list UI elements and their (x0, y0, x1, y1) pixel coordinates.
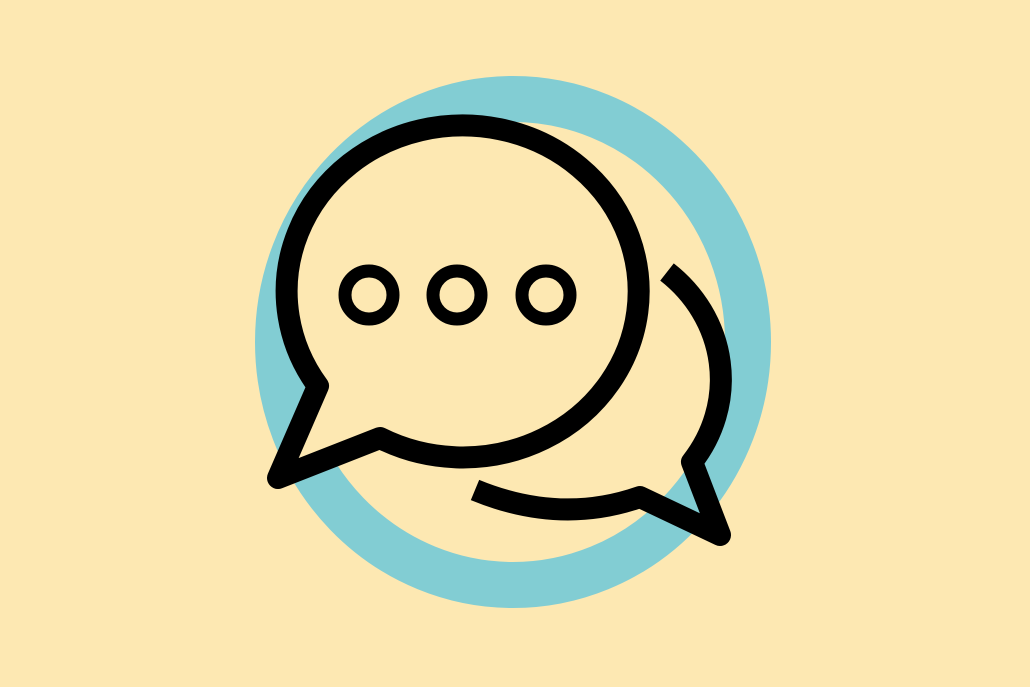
back speech bubble (475, 272, 721, 535)
dots (345, 271, 570, 319)
front speech bubble (278, 125, 639, 478)
blue ring (278, 99, 748, 585)
